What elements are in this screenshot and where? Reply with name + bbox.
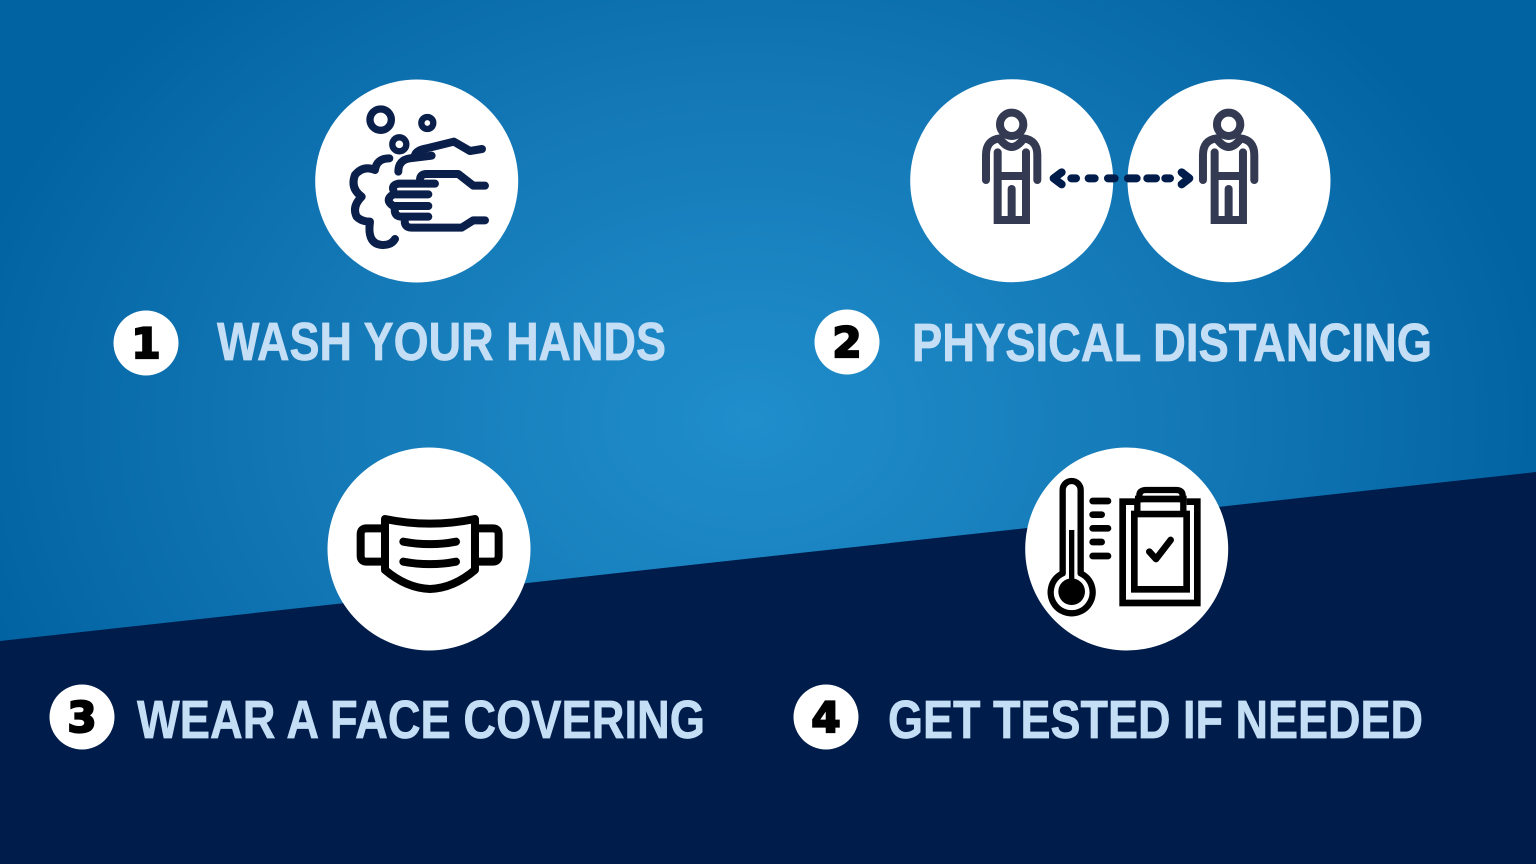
number badge 2 (814, 310, 880, 374)
panel: step 4 get tested if needed (794, 448, 1423, 750)
number badge 4: 4 (811, 693, 841, 742)
number badge 1: 1 (131, 319, 161, 368)
number badge 2: 2 (832, 318, 862, 367)
number badge 4 (794, 684, 858, 750)
heading: get tested if needed: GET TESTED IF NEEDED (888, 690, 1423, 750)
number badge 3 (50, 684, 114, 750)
icon: face mask (328, 448, 530, 650)
heading: physical distancing: PHYSICAL DISTANCING (912, 313, 1432, 373)
number badge 3: 3 (67, 693, 97, 742)
heading: wear a face covering: WEAR A FACE COVERING (137, 690, 705, 750)
panel: step 2 physical distancing (814, 79, 1432, 374)
panel: step 3 wear a face covering (50, 448, 705, 750)
icon: hand washing (315, 80, 518, 282)
heading: wash your hands: WASH YOUR HANDS (217, 312, 666, 372)
background: dark navy diagonal band (0, 472, 1536, 864)
icon: two people at a distance (910, 79, 1330, 282)
number badge 1 (114, 310, 178, 376)
icon: thermometer and clipboard (1025, 448, 1228, 650)
panel: step 1 wash your hands (114, 80, 666, 376)
